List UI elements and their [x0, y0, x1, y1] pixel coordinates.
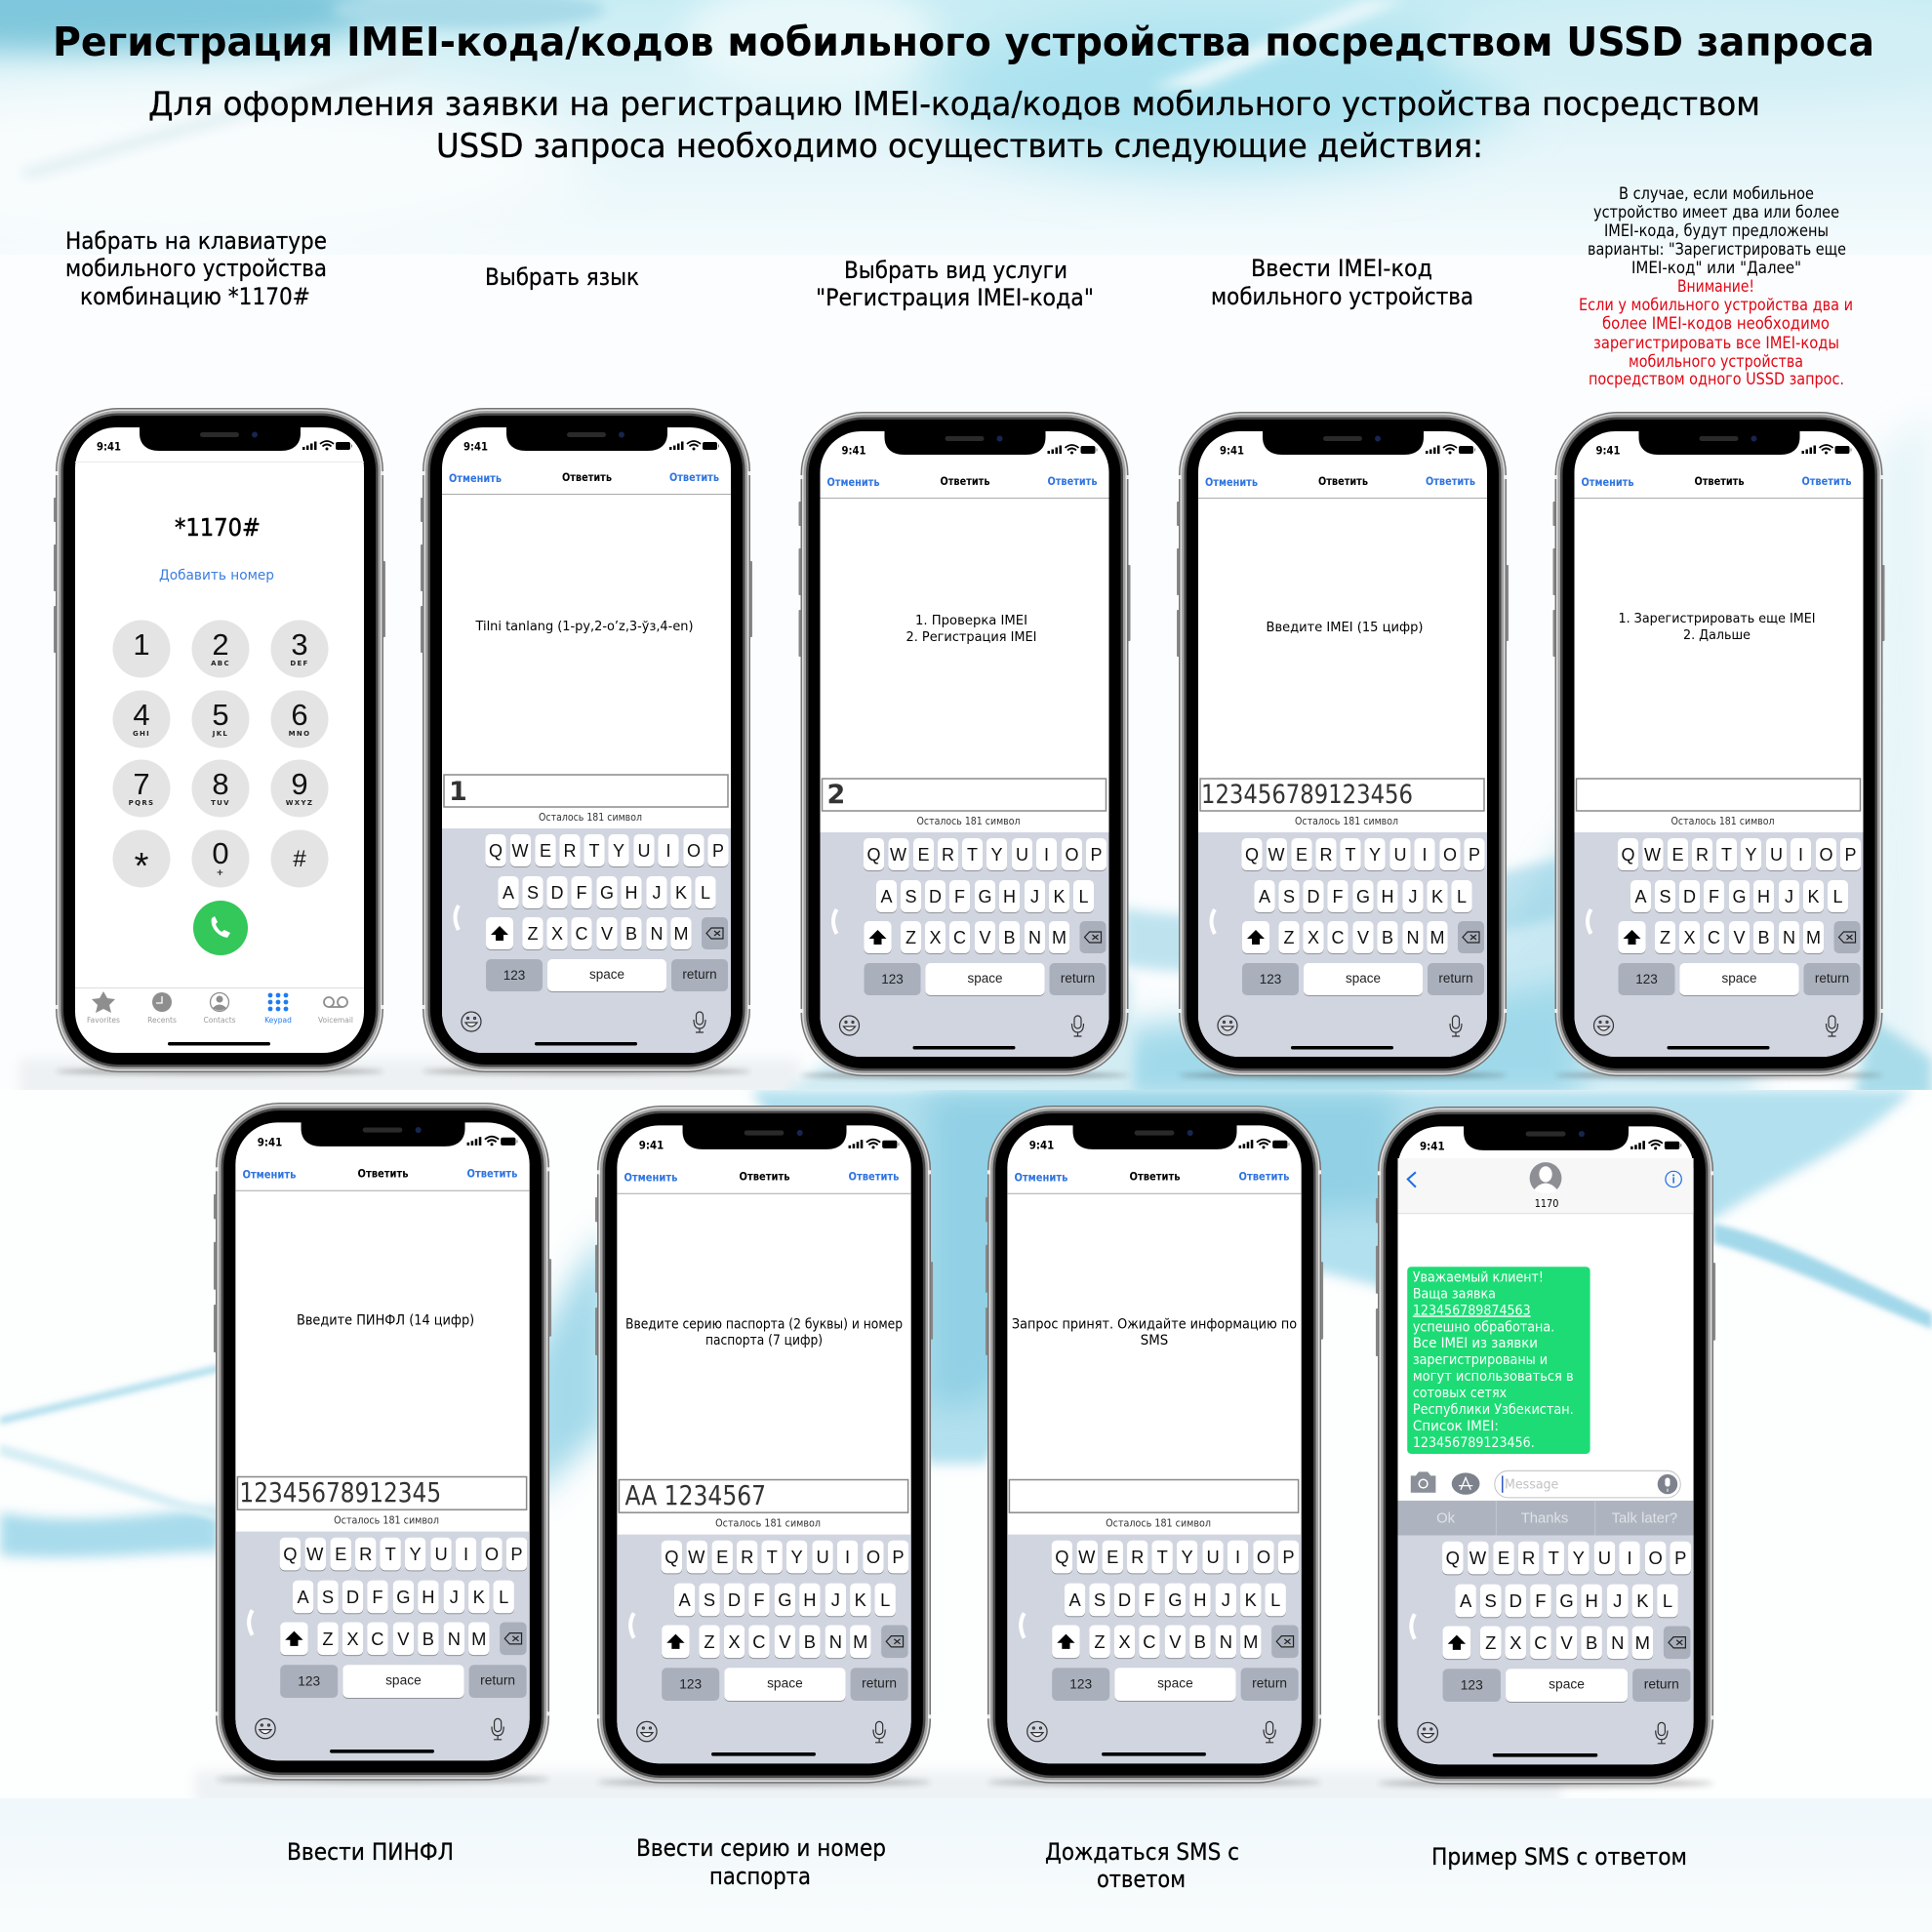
- input field: 1: [449, 777, 467, 807]
- green message bubble: Все IMEI из заявки: [1413, 1336, 1538, 1351]
- reply header: Отменить: [449, 471, 502, 485]
- phone 8: request accepted: [986, 1106, 1323, 1786]
- keyboard: ASDFGHJKL: [297, 1587, 508, 1607]
- step label 4: мобильного устройства: [1211, 283, 1473, 310]
- keyboard: ASDFGHJKL: [1634, 887, 1843, 906]
- keyboard: space: [385, 1673, 422, 1688]
- keyboard: 123: [1461, 1678, 1483, 1693]
- keyboard: return: [1815, 971, 1849, 986]
- tab bar: [75, 987, 364, 1025]
- keyboard: ZXCVBNM: [527, 924, 689, 944]
- keyboard: [1198, 832, 1487, 1057]
- keypad: 4: [133, 698, 150, 732]
- phone 6: enter PINFL: [214, 1103, 551, 1783]
- remaining counter: Осталось 181 символ: [1106, 1516, 1211, 1529]
- keyboard: ZXCVBNM: [906, 928, 1067, 947]
- keypad: 8: [212, 767, 229, 801]
- reply header: [1007, 1169, 1302, 1194]
- reply header: Ответить: [467, 1166, 517, 1181]
- keyboard: 123: [298, 1674, 320, 1689]
- message: [1012, 1316, 1297, 1348]
- keyboard: [1397, 1536, 1694, 1764]
- keyboard: [442, 828, 731, 1053]
- step label 5 with warning: более IMEI-кодов необходимо: [1602, 314, 1830, 333]
- keypad: *: [135, 846, 149, 887]
- reply header: Ответить: [1318, 474, 1368, 488]
- keyboard: space: [1346, 971, 1381, 986]
- step label 5 with warning: варианты: "Зарегистрировать еще: [1588, 240, 1846, 259]
- reply header: Отменить: [1581, 475, 1633, 489]
- keypad: 0: [212, 836, 229, 870]
- SMS header: [1397, 1158, 1694, 1214]
- phone 9: SMS reply: 9:41: [1420, 1139, 1445, 1152]
- green message bubble: [1407, 1267, 1590, 1454]
- step label 3: [816, 257, 1094, 311]
- phone 1: dial pad: 9:41: [97, 439, 121, 453]
- green message bubble: Уважаемый клиент!: [1413, 1270, 1544, 1286]
- message: Введите ПИНФЛ (14 цифр): [297, 1312, 474, 1328]
- keyboard: QWERTYUIOP: [283, 1544, 523, 1564]
- message: [1618, 611, 1815, 643]
- step label 5 with warning: IMEI-кода, будут предложены: [1604, 221, 1829, 240]
- subtitle: USSD запроса необходимо осуществить следующие действия:: [436, 127, 1483, 166]
- keyboard: QWERTYUIOP: [664, 1547, 905, 1567]
- step label 5 with warning: зарегистрировать все IMEI-коды: [1593, 334, 1839, 352]
- keyboard: return: [1252, 1676, 1287, 1691]
- green message bubble: успешно обработана.: [1413, 1319, 1554, 1335]
- step label 5 with warning: [1579, 184, 1853, 388]
- subtitle: [148, 85, 1760, 166]
- input field: [822, 779, 1107, 811]
- step label: wait for SMS: ответом: [1097, 1866, 1186, 1893]
- keyboard: return: [1644, 1677, 1679, 1692]
- phone 6: enter PINFL: 9:41: [258, 1135, 282, 1148]
- keyboard: ZXCVBNM: [1660, 928, 1821, 947]
- phone 3: choose service: 9:41: [841, 443, 866, 457]
- keypad: 3: [291, 627, 308, 662]
- message: Tilni tanlang (1-ру,2-o’z,3-ўз,4-en): [475, 619, 694, 634]
- keyboard: space: [589, 967, 624, 982]
- message: 2. Дальше: [1683, 627, 1751, 643]
- phone 5: register another IMEI: 9:41: [1596, 443, 1620, 457]
- reply header: Ответить: [358, 1166, 408, 1181]
- reply header: [617, 1169, 911, 1194]
- keyboard: ASDFGHJKL: [880, 887, 1089, 906]
- reply header: Отменить: [1014, 1171, 1067, 1185]
- step label 4: Ввести IMEI-код: [1251, 255, 1432, 282]
- keyboard: QWERTYUIOP: [1245, 845, 1480, 865]
- keyboard: QWERTYUIOP: [1446, 1548, 1686, 1568]
- phone 5: register another IMEI: [1553, 412, 1885, 1078]
- reply header: Отменить: [1205, 475, 1258, 489]
- keypad: TUV: [211, 799, 230, 807]
- keyboard: 123: [1069, 1677, 1092, 1692]
- keypad: ABC: [211, 660, 230, 667]
- keypad: GHI: [133, 730, 150, 738]
- green message bubble: 123456789123456.: [1413, 1435, 1535, 1451]
- phone 4: enter IMEI: 9:41: [1220, 443, 1244, 457]
- remaining counter: Осталось 181 символ: [715, 1516, 821, 1529]
- phone 4: enter IMEI: [1177, 412, 1509, 1078]
- keyboard: [820, 832, 1108, 1057]
- message: 1. Проверка IMEI: [915, 613, 1027, 628]
- message: Введите серию паспорта (2 буквы) и номер: [625, 1316, 903, 1332]
- reply header: Ответить: [562, 470, 612, 484]
- suggestion bar: [1397, 1501, 1694, 1536]
- keypad: #: [293, 846, 306, 872]
- phone 2: choose language: 9:41: [463, 439, 488, 453]
- reply header: Ответить: [669, 470, 719, 484]
- input field: [619, 1480, 908, 1512]
- keyboard: ASDFGHJKL: [1259, 887, 1467, 906]
- keyboard: ASDFGHJKL: [503, 883, 710, 903]
- keyboard: ZXCVBNM: [322, 1629, 486, 1649]
- reply header: Ответить: [1048, 474, 1097, 488]
- icon: green call button: [193, 901, 248, 955]
- keyboard: space: [1549, 1677, 1585, 1692]
- keyboard: space: [1157, 1676, 1193, 1691]
- keyboard: return: [1061, 971, 1095, 986]
- reply header: Ответить: [849, 1169, 899, 1184]
- input field: 12345678912345: [239, 1477, 441, 1509]
- phone 2: choose language: [421, 408, 752, 1074]
- keypad: 9: [291, 767, 308, 801]
- keyboard: return: [1438, 971, 1473, 986]
- input field: 123456789123456: [1201, 780, 1413, 810]
- keyboard: return: [682, 967, 717, 982]
- keyboard: space: [967, 971, 1003, 986]
- green message bubble: Список IMEI:: [1413, 1419, 1499, 1434]
- reply header: Отменить: [242, 1168, 296, 1182]
- step label: wait for SMS: [1045, 1838, 1239, 1893]
- keypad: 7: [133, 767, 150, 801]
- suggestion bar: Thanks: [1521, 1510, 1568, 1526]
- keypad: 1: [133, 627, 150, 662]
- keyboard: ZXCVBNM: [1485, 1632, 1650, 1653]
- tab bar: Contacts: [203, 1016, 236, 1025]
- reply header: [1575, 474, 1864, 499]
- step label 5 with warning: Если у мобильного устройства два и: [1579, 296, 1853, 314]
- message input row: [1411, 1470, 1680, 1498]
- keypad: WXYZ: [286, 799, 313, 807]
- title: Регистрация IMEI-кода/кодов мобильного устройства посредством USSD запроса: [53, 19, 1874, 65]
- remaining counter: Осталось 181 символ: [539, 812, 642, 824]
- reply header: Ответить: [740, 1169, 789, 1184]
- phone 3: choose service: [798, 412, 1130, 1078]
- reply header: Отменить: [624, 1171, 677, 1185]
- step label 3: "Регистрация IMEI-кода": [816, 284, 1094, 311]
- input field: [1009, 1480, 1299, 1512]
- green message bubble: Республики Узбекистан.: [1413, 1402, 1574, 1418]
- step label 5 with warning: В случае, если мобильное: [1619, 184, 1814, 203]
- step label 4: [1211, 255, 1473, 310]
- keyboard: 123: [503, 968, 525, 983]
- keypad: +: [217, 868, 224, 878]
- step label: passport: [636, 1834, 886, 1890]
- tab bar: Favorites: [87, 1016, 120, 1025]
- keyboard: return: [862, 1676, 897, 1691]
- keyboard: ASDFGHJKL: [1068, 1590, 1280, 1610]
- reply header: Ответить: [1426, 474, 1475, 488]
- keyboard: [617, 1535, 911, 1763]
- step label 5 with warning: устройство имеет два или более: [1593, 203, 1839, 221]
- reply header: Ответить: [1130, 1169, 1180, 1184]
- step label: wait for SMS: Дождаться SMS с: [1045, 1838, 1239, 1866]
- keyboard: [1575, 832, 1864, 1057]
- keypad: 6: [291, 698, 308, 732]
- message: 1. Зарегистрировать еще IMEI: [1618, 611, 1815, 626]
- green message bubble: могут использоваться в: [1413, 1369, 1574, 1385]
- message: Введите IMEI (15 цифр): [1267, 620, 1423, 635]
- reply header: Ответить: [1239, 1169, 1289, 1184]
- keypad: JKL: [212, 730, 228, 738]
- reply header: Отменить: [827, 475, 880, 489]
- input field: 2: [827, 780, 845, 810]
- reply header: Ответить: [941, 474, 989, 488]
- keyboard: space: [767, 1676, 803, 1691]
- step label 1: мобильного устройства: [65, 255, 327, 282]
- reply header: Ответить: [1694, 474, 1745, 488]
- step label 1: комбинацию *1170#: [80, 283, 310, 310]
- message input row: Message: [1505, 1478, 1558, 1493]
- keypad: PQRS: [129, 799, 154, 807]
- phone 7: enter passport: [595, 1106, 933, 1786]
- keyboard: return: [480, 1673, 515, 1688]
- step label: passport: паспорта: [709, 1863, 811, 1890]
- keyboard: [235, 1532, 530, 1760]
- remaining counter: Осталось 181 символ: [1295, 816, 1398, 827]
- phone 7: enter passport: 9:41: [639, 1138, 664, 1151]
- input field: [1577, 779, 1860, 811]
- input field: AA 1234567: [625, 1480, 766, 1511]
- reply header: [1198, 474, 1487, 499]
- remaining counter: Осталось 181 символ: [334, 1513, 439, 1526]
- keyboard: 123: [881, 972, 904, 986]
- message: [625, 1316, 903, 1348]
- keyboard: [1007, 1535, 1302, 1763]
- remaining counter: Осталось 181 символ: [917, 816, 1021, 827]
- phone 9: SMS reply: [1376, 1107, 1715, 1787]
- keyboard: ZXCVBNM: [1094, 1631, 1258, 1652]
- keyboard: 123: [1635, 972, 1658, 986]
- step label 1: Набрать на клавиатуре: [65, 227, 327, 255]
- reply header: [235, 1166, 530, 1191]
- keypad: DEF: [290, 660, 309, 667]
- keyboard: ZXCVBNM: [704, 1631, 867, 1652]
- phone 8: request accepted: 9:41: [1029, 1138, 1054, 1151]
- green message bubble: 123456789874563: [1413, 1303, 1531, 1318]
- keyboard: ZXCVBNM: [1284, 928, 1444, 947]
- keyboard: space: [1721, 971, 1757, 986]
- message: 2. Регистрация IMEI: [906, 629, 1036, 645]
- step label 5 with warning: мобильного устройства: [1629, 352, 1803, 371]
- step label: SMS example: Пример SMS с ответом: [1431, 1843, 1687, 1871]
- green message bubble: сотовых сетях: [1413, 1386, 1507, 1401]
- message: SMS: [1141, 1333, 1168, 1348]
- keyboard: 123: [1260, 972, 1281, 986]
- suggestion bar: Ok: [1436, 1510, 1456, 1526]
- keyboard: 123: [679, 1677, 702, 1692]
- message: паспорта (7 цифр): [705, 1333, 823, 1348]
- tab bar: Keypad: [264, 1016, 292, 1025]
- step label: passport: Ввести серию и номер: [636, 1834, 886, 1862]
- keyboard: ASDFGHJKL: [1460, 1590, 1672, 1611]
- reply header: [820, 474, 1108, 499]
- suggestion bar: Talk later?: [1612, 1510, 1677, 1526]
- reply header: Ответить: [1801, 474, 1852, 488]
- tab bar: Recents: [147, 1016, 177, 1025]
- step label 2: Выбрать язык: [485, 263, 639, 291]
- message: Запрос принят. Ожидайте информацию по: [1012, 1316, 1297, 1332]
- green message bubble: зарегистрированы и: [1413, 1352, 1548, 1368]
- step label: PINFL: Ввести ПИНФЛ: [287, 1838, 454, 1866]
- keyboard: QWERTYUIOP: [866, 845, 1103, 865]
- keypad: [113, 621, 328, 888]
- keypad: 5: [212, 698, 229, 732]
- input field: [444, 775, 728, 807]
- keyboard: QWERTYUIOP: [1621, 845, 1857, 865]
- remaining counter: Осталось 181 символ: [1670, 816, 1774, 827]
- keypad: 2: [212, 627, 229, 662]
- step label 3: Выбрать вид услуги: [844, 257, 1067, 284]
- SMS header: 1170: [1535, 1197, 1559, 1210]
- keypad: MNO: [289, 730, 310, 738]
- dialed number: *1170#: [175, 513, 261, 542]
- step label 5 with warning: Внимание!: [1677, 277, 1754, 296]
- keyboard: QWERTYUIOP: [489, 841, 724, 861]
- subtitle: Для оформления заявки на регистрацию IMEI-кода/кодов мобильного устройства посредством: [148, 85, 1760, 124]
- message: [906, 613, 1036, 645]
- phone 1: dial pad: [54, 408, 385, 1074]
- step label 5 with warning: IMEI-код" или "Далее": [1631, 259, 1801, 277]
- reply header: [442, 470, 731, 495]
- add number link: Добавить номер: [159, 568, 274, 584]
- tab bar: Voicemail: [318, 1016, 353, 1025]
- step label 1: [65, 227, 327, 310]
- keyboard: ASDFGHJKL: [678, 1590, 890, 1610]
- step label 5 with warning: посредством одного USSD запрос.: [1589, 370, 1844, 388]
- keyboard: QWERTYUIOP: [1055, 1547, 1295, 1567]
- green message bubble: Ваща заявка: [1413, 1286, 1496, 1302]
